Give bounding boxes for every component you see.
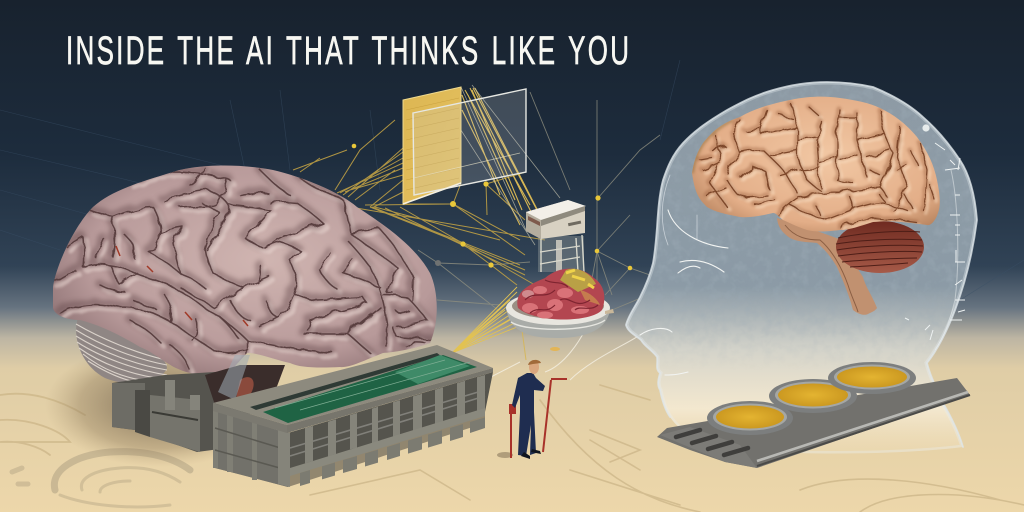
network nodes xyxy=(352,144,632,270)
glass panel xyxy=(413,89,526,195)
brain ground shadow xyxy=(45,343,275,467)
gyri shading xyxy=(58,172,436,374)
roof slab xyxy=(213,345,493,425)
gold mesh panel xyxy=(403,87,526,204)
cerebrum xyxy=(692,97,940,232)
machine on stand xyxy=(526,200,586,272)
cerebrum shape xyxy=(53,166,437,375)
human head silhouette xyxy=(626,80,981,460)
green circuit board xyxy=(263,355,477,423)
gold fan beam from circuit to plate xyxy=(452,287,517,353)
legs xyxy=(300,418,485,486)
side scale ticks xyxy=(905,143,965,350)
cerebellum xyxy=(836,221,924,273)
gold network lines xyxy=(293,120,545,285)
sulci grooves xyxy=(700,103,935,227)
cerebellum striped xyxy=(76,318,167,384)
background sky grid lines xyxy=(0,60,1024,300)
curved white cables across sand xyxy=(485,330,640,380)
body xyxy=(512,373,545,456)
side wall xyxy=(213,410,288,487)
shadow under legs xyxy=(215,410,485,487)
brain stem xyxy=(777,218,877,315)
man with red instruments xyxy=(497,360,567,459)
head xyxy=(529,360,539,374)
sulci dark grooves xyxy=(54,168,433,370)
plate of brain tissue xyxy=(506,269,614,351)
sand floor etched pattern xyxy=(0,385,1024,512)
red instruments xyxy=(511,379,567,458)
rear building block xyxy=(112,355,285,452)
network lines xyxy=(293,85,660,380)
facial feature lines xyxy=(640,210,728,375)
gyri shading xyxy=(702,106,938,230)
realistic brain in head xyxy=(692,97,940,315)
grey network lines xyxy=(418,92,660,310)
title: INSIDE THE AI THAT THINKS LIKE YOU xyxy=(66,28,631,73)
pillars xyxy=(278,375,485,487)
electrode tray xyxy=(657,362,970,468)
disc wells xyxy=(707,401,793,435)
front wall recess xyxy=(288,372,493,472)
left brain xyxy=(52,166,437,384)
lower beam xyxy=(290,408,485,476)
circuit board building xyxy=(213,345,493,487)
